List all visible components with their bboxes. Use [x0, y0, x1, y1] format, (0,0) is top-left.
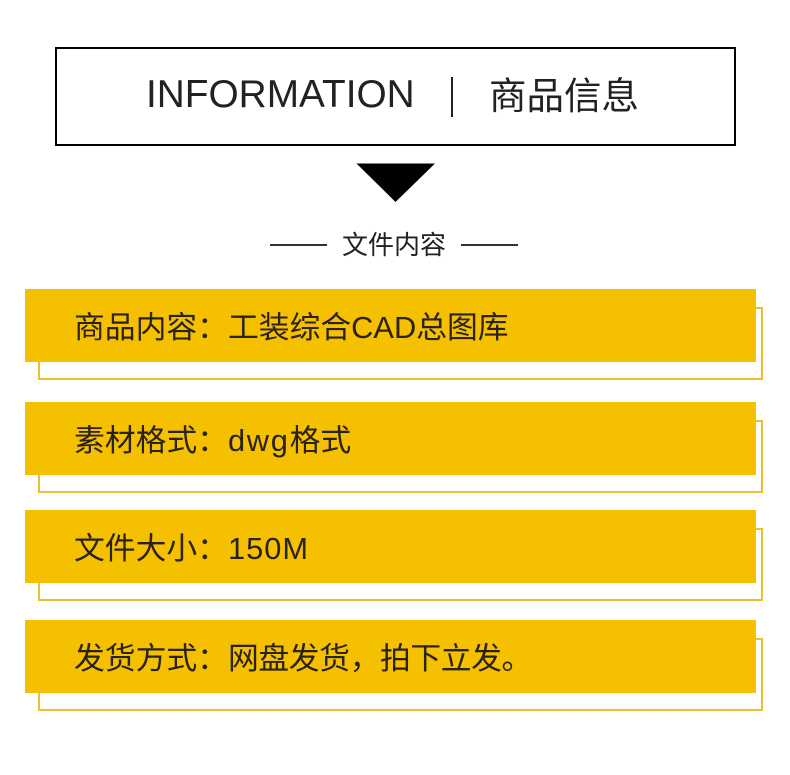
row text: 素材格式：dwg格式 [74, 423, 351, 458]
row outline [38, 528, 763, 601]
row: file format [25, 402, 763, 493]
row bar [25, 289, 756, 362]
icon: down arrow [356, 164, 435, 202]
title: INFORMATION [146, 73, 415, 116]
subheading text: 文件内容 [342, 230, 446, 260]
row outline [38, 638, 763, 711]
subheading right line [461, 244, 518, 246]
row text: 文件大小：150M [74, 531, 309, 566]
row: file size [25, 510, 763, 601]
subheading left line [270, 244, 327, 246]
row text: 发货方式：网盘发货，拍下立发。 [74, 641, 532, 676]
row bar [25, 402, 756, 475]
row: delivery [25, 620, 763, 711]
row outline [38, 307, 763, 380]
header box [55, 47, 736, 146]
row bar [25, 510, 756, 583]
title divider [451, 77, 453, 117]
row text: 商品内容：工装综合CAD总图库 [74, 310, 509, 345]
title chinese: 商品信息 [489, 75, 639, 117]
row outline [38, 420, 763, 493]
row bar [25, 620, 756, 693]
row: product content [25, 289, 763, 380]
